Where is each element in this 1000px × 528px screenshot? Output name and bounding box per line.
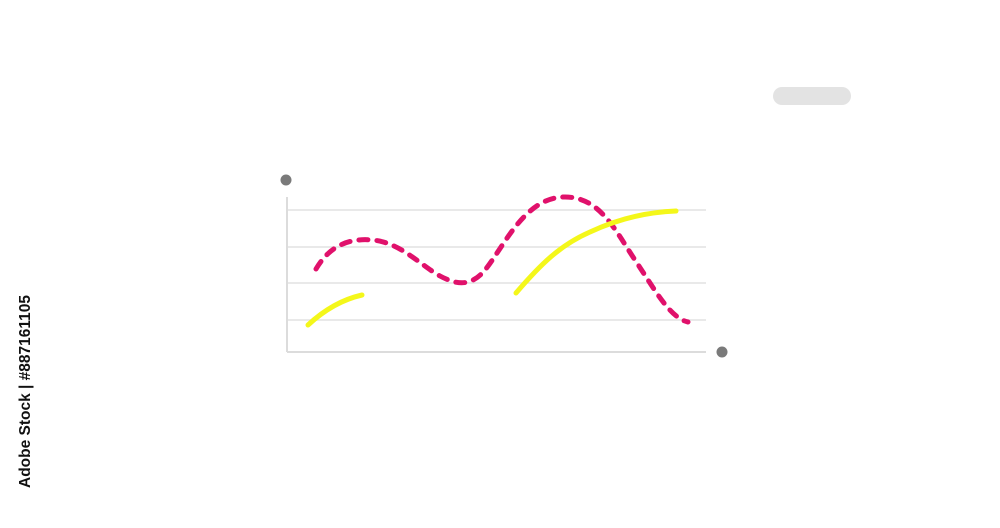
yellow line 2 [516, 211, 676, 293]
axis dots [280, 174, 728, 358]
gray pill [773, 87, 851, 105]
pink dashed line [316, 197, 688, 322]
yellow line 1 [308, 295, 362, 325]
axes [287, 197, 706, 352]
watermark id: Adobe Stock | #887161105 [17, 295, 34, 488]
grid lines [287, 210, 706, 320]
